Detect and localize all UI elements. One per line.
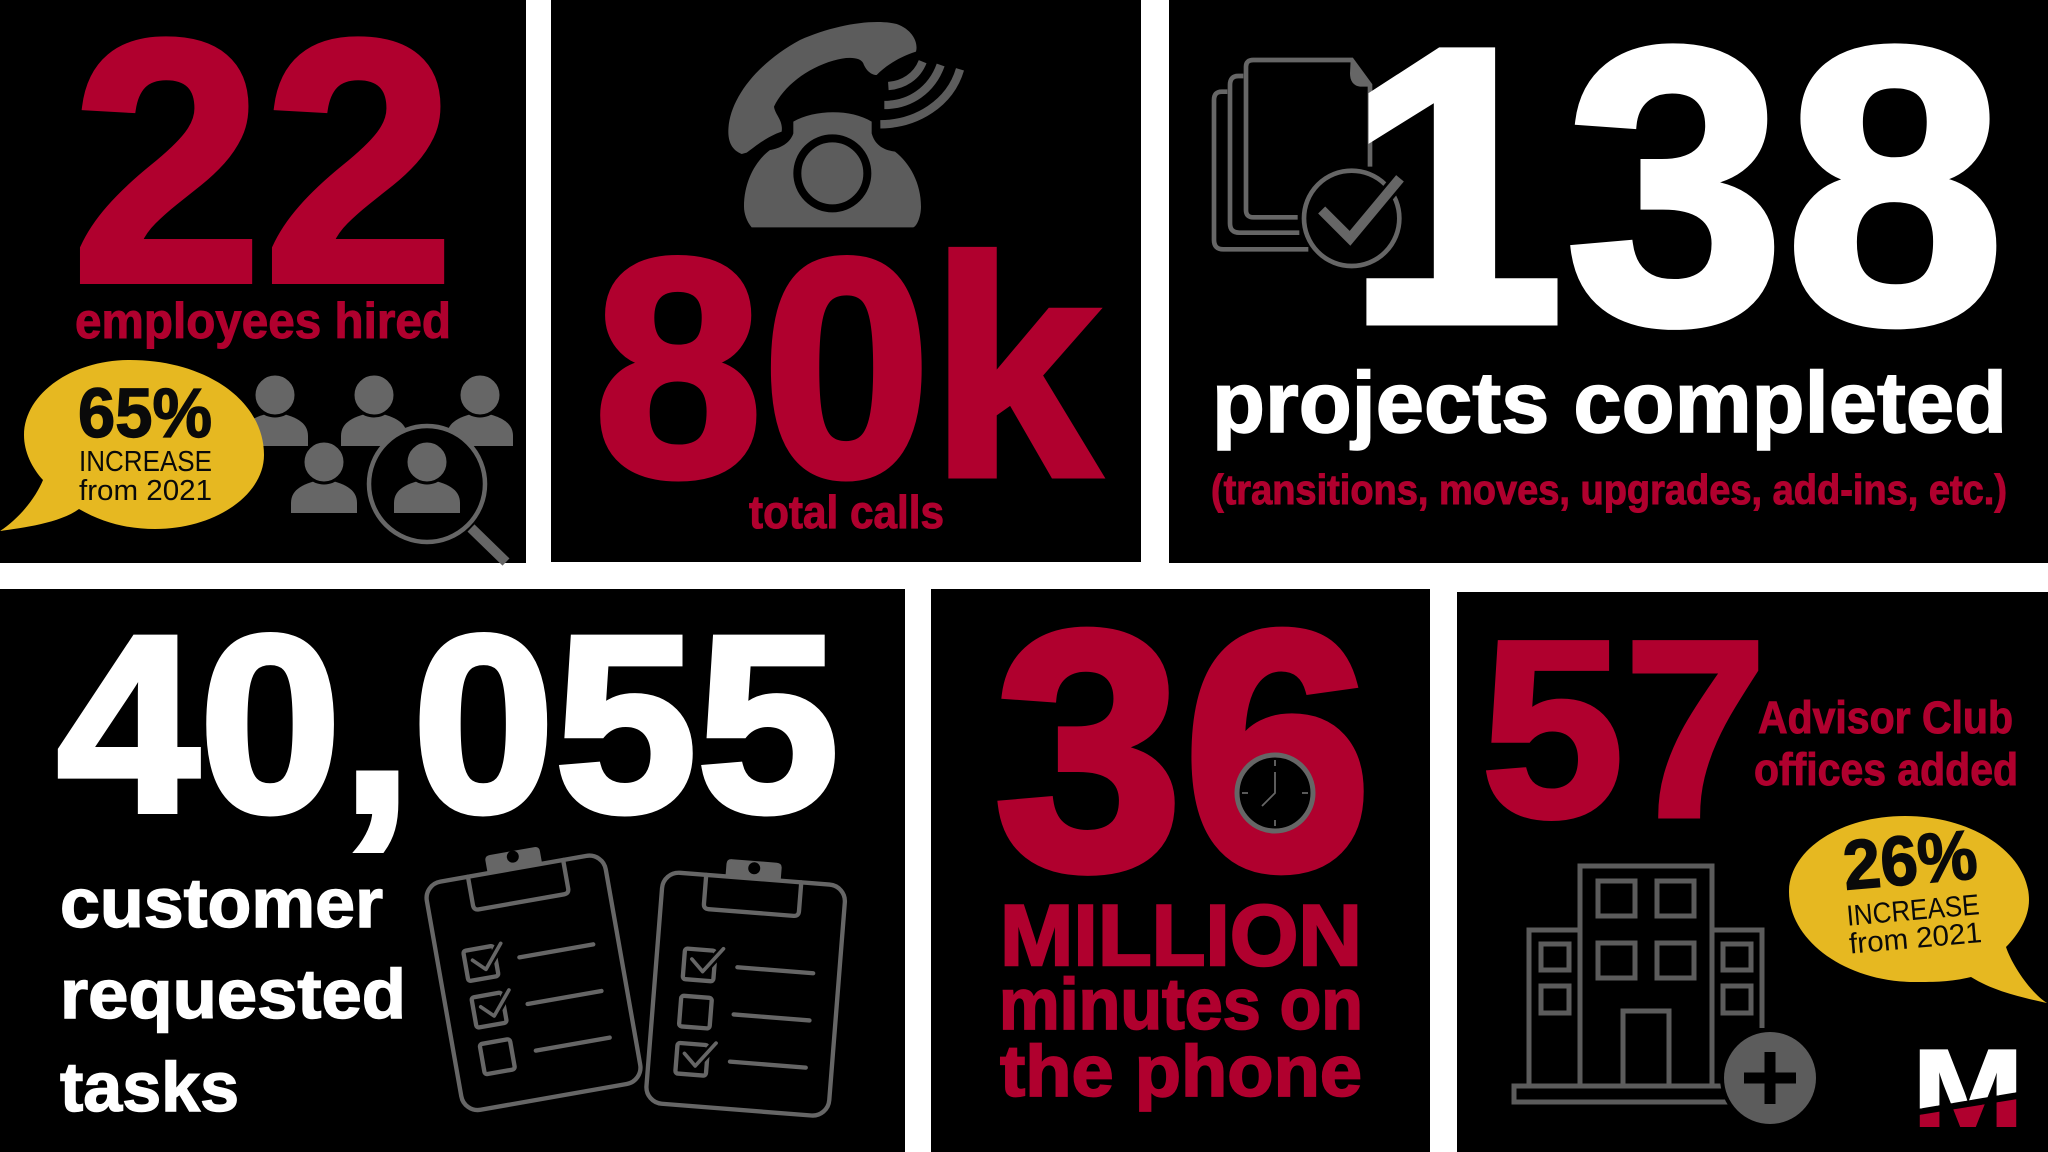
- number: 40,055: 40,055: [57, 584, 839, 865]
- label: Advisor Club offices added: [1754, 692, 2018, 795]
- number: 80k: 80k: [594, 194, 1101, 541]
- label: minutes on the phone: [999, 965, 1363, 1112]
- panel: million minutes: [931, 561, 1430, 1152]
- label: Advisor Club offices added: offices added: [1754, 744, 2018, 795]
- number: 57: 57: [1481, 589, 1767, 870]
- callout: 26% increase: 26%: [1840, 815, 1980, 905]
- label: Advisor Club offices added: Advisor Club: [1758, 692, 2013, 743]
- label: customer requested tasks: tasks: [60, 1048, 239, 1126]
- callout: 26% increase: [1789, 815, 2047, 1003]
- label: minutes on the phone: minutes on: [999, 965, 1363, 1045]
- icon: office building with plus: [1514, 866, 1820, 1128]
- number: 36: 36: [994, 561, 1372, 941]
- label: customer requested tasks: requested: [60, 955, 406, 1033]
- logo: M mark: [1920, 1049, 2016, 1127]
- panel: advisor club offices: [1457, 589, 2048, 1152]
- panel: employees hired: [0, 0, 526, 563]
- icon: people with magnifier: [242, 374, 513, 562]
- callout: 65% increase: INCREASE: [79, 446, 212, 478]
- label: minutes on the phone: the phone: [1000, 1032, 1362, 1112]
- label: employees hired: employees hired: [75, 293, 451, 349]
- panel: total calls: [551, 0, 1141, 562]
- icon: clipboards: [421, 835, 848, 1117]
- callout: 65% increase: 65%: [78, 374, 212, 452]
- callout: 26% increase: from 2021: [1848, 917, 1983, 961]
- icon: document stack with check: [1214, 60, 1400, 266]
- label: projects completed: projects completed: [1212, 355, 2007, 451]
- callout: 26% increase: INCREASE: [1845, 889, 1981, 933]
- callout: 65% increase: [0, 360, 264, 531]
- panel: customer requested tasks: [0, 584, 905, 1152]
- logo: M mark: M: [1912, 1027, 2024, 1150]
- panel: projects completed: [1169, 0, 2048, 563]
- icon: telephone: [728, 22, 960, 227]
- label: total calls: total calls: [749, 486, 944, 538]
- label: customer requested tasks: customer: [60, 864, 383, 942]
- callout: 65% increase: from 2021: [79, 475, 212, 507]
- logo: M mark: M: [1912, 1027, 2024, 1150]
- label: customer requested tasks: [60, 864, 406, 1126]
- icon: clock: [1237, 755, 1313, 831]
- label: MILLION: MILLION: [1000, 888, 1362, 984]
